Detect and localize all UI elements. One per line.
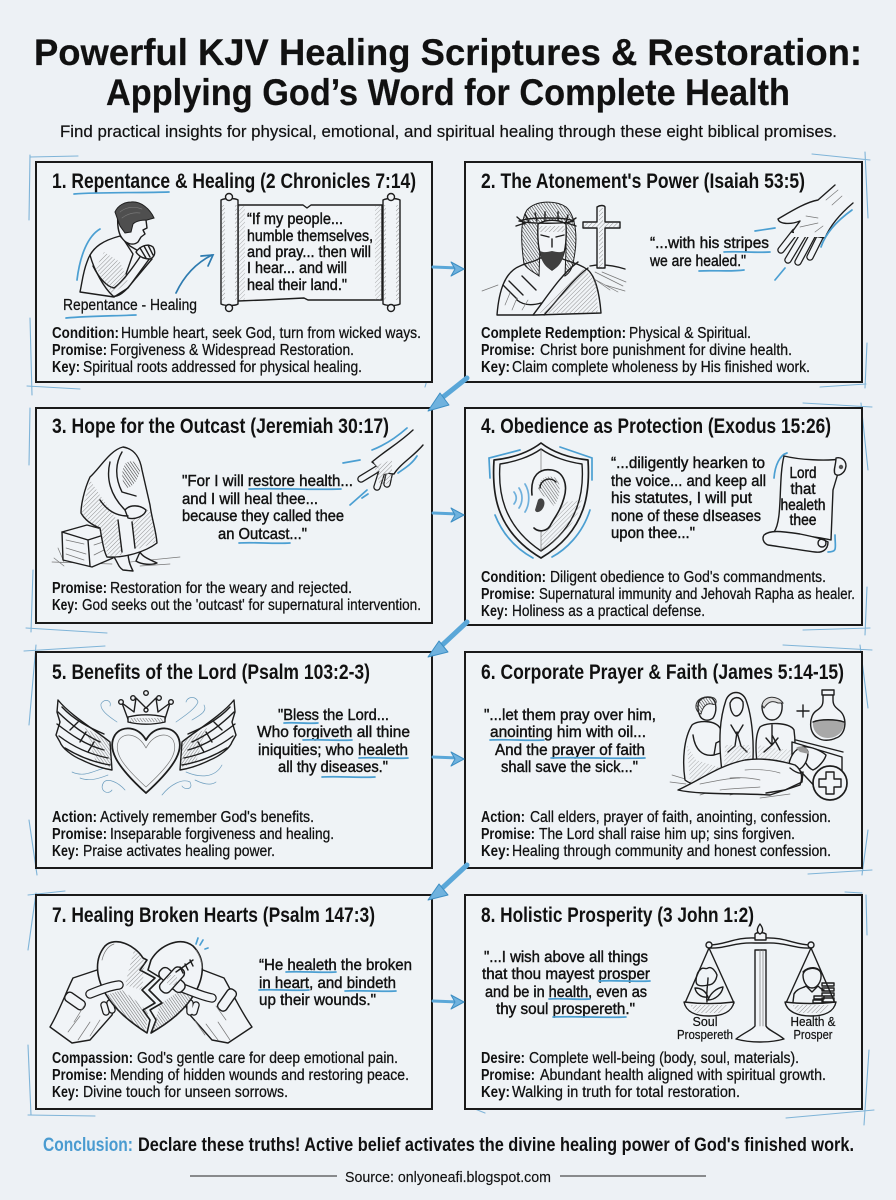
quote 5: all thy diseases." xyxy=(278,759,388,776)
icon: Christ with crown of thorns and cross xyxy=(482,202,626,315)
quote 4: none of these dIseases xyxy=(611,508,761,525)
icon: balance scale: Prosper xyxy=(794,1028,832,1042)
key points 5: Promise: xyxy=(52,826,107,843)
key points 5: Key: xyxy=(52,843,79,860)
panel: 3 Hope for the Outcast xyxy=(36,408,432,623)
key points 8: Promise: xyxy=(481,1067,535,1084)
key points 8: Walking in truth for total restoration. xyxy=(512,1084,740,1101)
quote 1: and pray... then will xyxy=(247,244,371,261)
key points 4 xyxy=(481,569,855,620)
key points 4: Promise: xyxy=(481,586,535,603)
quote 4 xyxy=(611,455,766,542)
quote 5 xyxy=(257,707,410,777)
key points 2: Claim complete wholeness by His finished work. xyxy=(512,359,810,376)
key points 4: Key: xyxy=(481,603,508,620)
icon: elders praying over the sick xyxy=(670,690,847,800)
key points 5: Inseparable forgiveness and healing. xyxy=(110,826,334,843)
quote 1: I hear... and will xyxy=(247,260,347,277)
panel: 8 Holistic Prosperity xyxy=(465,895,862,1109)
key points 6: Key: xyxy=(481,843,510,860)
quote 5: iniquities; who healeth xyxy=(258,742,408,759)
icon: balance scale: Prospereth xyxy=(677,1028,733,1042)
quote 6 xyxy=(484,707,656,776)
key points 8: Desire: xyxy=(481,1050,525,1067)
quote 8: and be in health, even as xyxy=(485,984,647,1001)
key points 8: Key: xyxy=(481,1084,510,1101)
key points 6 xyxy=(481,809,831,860)
key points 7: Mending of hidden wounds and restoring peace. xyxy=(110,1067,409,1084)
key points 6: Promise: xyxy=(481,826,535,843)
key points 7: Promise: xyxy=(52,1067,107,1084)
quote 1: heal their land." xyxy=(247,277,347,294)
key points 5: Praise activates healing power. xyxy=(83,843,275,860)
heading 2: 2. The Atonement's Power (Isaiah 53:5) xyxy=(481,170,805,193)
quote 8: "...I wish above all things xyxy=(484,949,648,966)
icon: scroll Lord that healeth thee: thee xyxy=(790,512,816,529)
icon: balance scale: Soul xyxy=(692,1015,718,1029)
quote 5: Who forgiveth all thine xyxy=(257,724,410,741)
quote 1: humble themselves, xyxy=(247,228,373,245)
icon: hooded outcast on a stone xyxy=(52,447,180,571)
panel: 1 Repentance and Healing xyxy=(36,162,432,382)
quote 7: up their wounds." xyxy=(259,992,376,1009)
arrow: panel 1 to 2 xyxy=(433,262,464,276)
quote 8 xyxy=(482,949,650,1018)
key points 2: Promise: xyxy=(481,342,535,359)
quote 3: because they called thee xyxy=(182,508,344,525)
key points 6: Healing through community and honest confession. xyxy=(512,843,831,860)
label: Repentance - Healing: Repentance - Healing xyxy=(63,297,197,314)
quote 1 xyxy=(247,211,373,294)
key points 7 xyxy=(52,1050,409,1101)
quote 6: shall save the sick..." xyxy=(501,759,638,776)
key points 7: Compassion: xyxy=(52,1050,133,1067)
key points 4: Diligent obedience to God's commandments. xyxy=(550,569,826,586)
quote 8: that thou mayest prosper xyxy=(482,966,650,983)
icon: scroll Lord that healeth thee: that xyxy=(790,481,816,498)
key points 1 xyxy=(52,325,421,376)
key points 5 xyxy=(52,809,334,860)
icon: man praying xyxy=(77,202,155,297)
key points 3: God seeks out the 'outcast' for supernatural intervention. xyxy=(82,597,421,614)
icon: shield with ear xyxy=(489,443,592,558)
icon: broken heart held by hands xyxy=(50,938,252,1043)
arrow: panel 7 to 8 xyxy=(433,995,464,1009)
key points 6: Action: xyxy=(481,809,525,826)
key points 1: Humble heart, seek God, turn from wicked ways. xyxy=(121,325,421,342)
panel: 4 Obedience as Protection xyxy=(465,408,862,625)
quote 8: thy soul prospereth." xyxy=(496,1001,635,1018)
icon: winged heart with crown xyxy=(56,691,236,795)
heading 1: 1. Repentance & Healing (2 Chronicles 7:14) xyxy=(52,170,416,193)
arrow: panel 5 to 6 xyxy=(433,752,464,766)
key points 6: The Lord shall raise him up; sins forgiven. xyxy=(539,826,795,843)
quote 5: "Bless the Lord... xyxy=(278,707,389,724)
title: Applying God’s Word for Complete Health xyxy=(106,71,790,113)
arrow: panel 4 to 5 xyxy=(428,622,467,657)
heading 7: 7. Healing Broken Hearts (Psalm 147:3) xyxy=(52,904,375,927)
subtitle: Find practical insights for physical, emotional, and spiritual healing through these eight biblical promises. xyxy=(60,122,837,141)
quote 4: the voice... and keep all xyxy=(611,473,766,490)
key points 2: Christ bore punishment for divine health. xyxy=(540,342,792,359)
icon: balance scale xyxy=(677,924,836,1042)
title: Powerful KJV Healing Scriptures & Restoration: xyxy=(34,31,862,73)
heading 8: 8. Holistic Prosperity (3 John 1:2) xyxy=(481,904,754,927)
quote 1: “If my people... xyxy=(247,211,343,228)
key points 1: Promise: xyxy=(52,342,107,359)
icon: open hand xyxy=(755,185,853,280)
quote 3: "For I will restore health... xyxy=(182,473,353,490)
icon: reaching hand xyxy=(343,428,423,505)
key points 1: Forgiveness & Widespread Restoration. xyxy=(110,342,354,359)
key points 2 xyxy=(481,325,810,376)
key points 8: Abundant health aligned with spiritual growth. xyxy=(540,1067,826,1084)
quote 2: we are healed." xyxy=(649,253,746,270)
panel: 5 Benefits of the Lord xyxy=(36,652,432,868)
key points 1: Spiritual roots addressed for physical healing. xyxy=(83,359,362,376)
key points 3: Key: xyxy=(52,597,78,614)
title xyxy=(34,31,862,113)
key points 2: Key: xyxy=(481,359,510,376)
quote 6: "...let them pray over him, xyxy=(484,707,656,724)
panel: 7 Healing Broken Hearts xyxy=(36,895,432,1109)
key points 7: Key: xyxy=(52,1084,79,1101)
icon: balance scale: Health & xyxy=(790,1015,836,1029)
quote 7 xyxy=(259,957,412,1009)
quote 4: “...diligently hearken to xyxy=(611,455,765,472)
quote 2 xyxy=(649,235,770,271)
conclusion: Conclusion: xyxy=(43,1135,133,1156)
quote 4: upon thee..." xyxy=(611,525,695,542)
quote 7: in heart, and bindeth xyxy=(259,975,396,992)
arrow: repentance to scroll xyxy=(176,255,213,293)
quote 6: anointing him with oil... xyxy=(490,724,646,741)
source line: Source: onlyoneafi.blogspot.com xyxy=(345,1169,551,1186)
arrow: panel 6 to 7 xyxy=(428,865,467,900)
key points 4: Condition: xyxy=(481,569,546,586)
quote 2: “...with his stripes xyxy=(650,235,769,252)
quote 4: his statutes, I will put xyxy=(611,490,753,507)
icon: scroll xyxy=(221,194,400,312)
panel: 6 Corporate Prayer and Faith xyxy=(465,652,862,868)
key points 1: Key: xyxy=(52,359,80,376)
key points 1: Condition: xyxy=(52,325,119,342)
icon: scroll Lord that healeth thee xyxy=(763,453,846,552)
key points 7: Divine touch for unseen sorrows. xyxy=(83,1084,288,1101)
key points 7: God's gentle care for deep emotional pain. xyxy=(137,1050,398,1067)
panel: 2 The Atonement's Power xyxy=(465,162,862,382)
heading 3: 3. Hope for the Outcast (Jeremiah 30:17) xyxy=(52,415,389,438)
key points 3: Promise: xyxy=(52,580,107,597)
quote 3 xyxy=(182,473,353,543)
icon: scroll Lord that healeth thee: healeth xyxy=(780,497,826,514)
quote 6: And the prayer of faith xyxy=(495,742,645,759)
quote 3: an Outcast..." xyxy=(218,526,307,543)
key points 8 xyxy=(481,1050,826,1101)
arrow: panel 3 to 4 xyxy=(433,508,464,522)
key points 6: Call elders, prayer of faith, anointing, confession. xyxy=(530,809,831,826)
key points 3: Restoration for the weary and rejected. xyxy=(110,580,352,597)
icon: scroll Lord that healeth thee: Lord xyxy=(790,465,816,482)
key points 3 xyxy=(52,580,421,614)
key points 2: Complete Redemption: xyxy=(481,325,626,342)
key points 5: Actively remember God's benefits. xyxy=(100,809,314,826)
quote 3: and I will heal thee... xyxy=(182,491,318,508)
key points 2: Physical & Spiritual. xyxy=(629,325,751,342)
quote 7: “He healeth the broken xyxy=(259,957,412,974)
key points 4: Holiness as a practical defense. xyxy=(512,603,705,620)
heading 4: 4. Obedience as Protection (Exodus 15:26) xyxy=(481,415,831,438)
arrow: panel 2 to 3 xyxy=(428,378,467,411)
key points 5: Action: xyxy=(52,809,97,826)
heading 5: 5. Benefits of the Lord (Psalm 103:2-3) xyxy=(52,661,370,684)
key points 8: Complete well-being (body, soul, materials). xyxy=(529,1050,799,1067)
